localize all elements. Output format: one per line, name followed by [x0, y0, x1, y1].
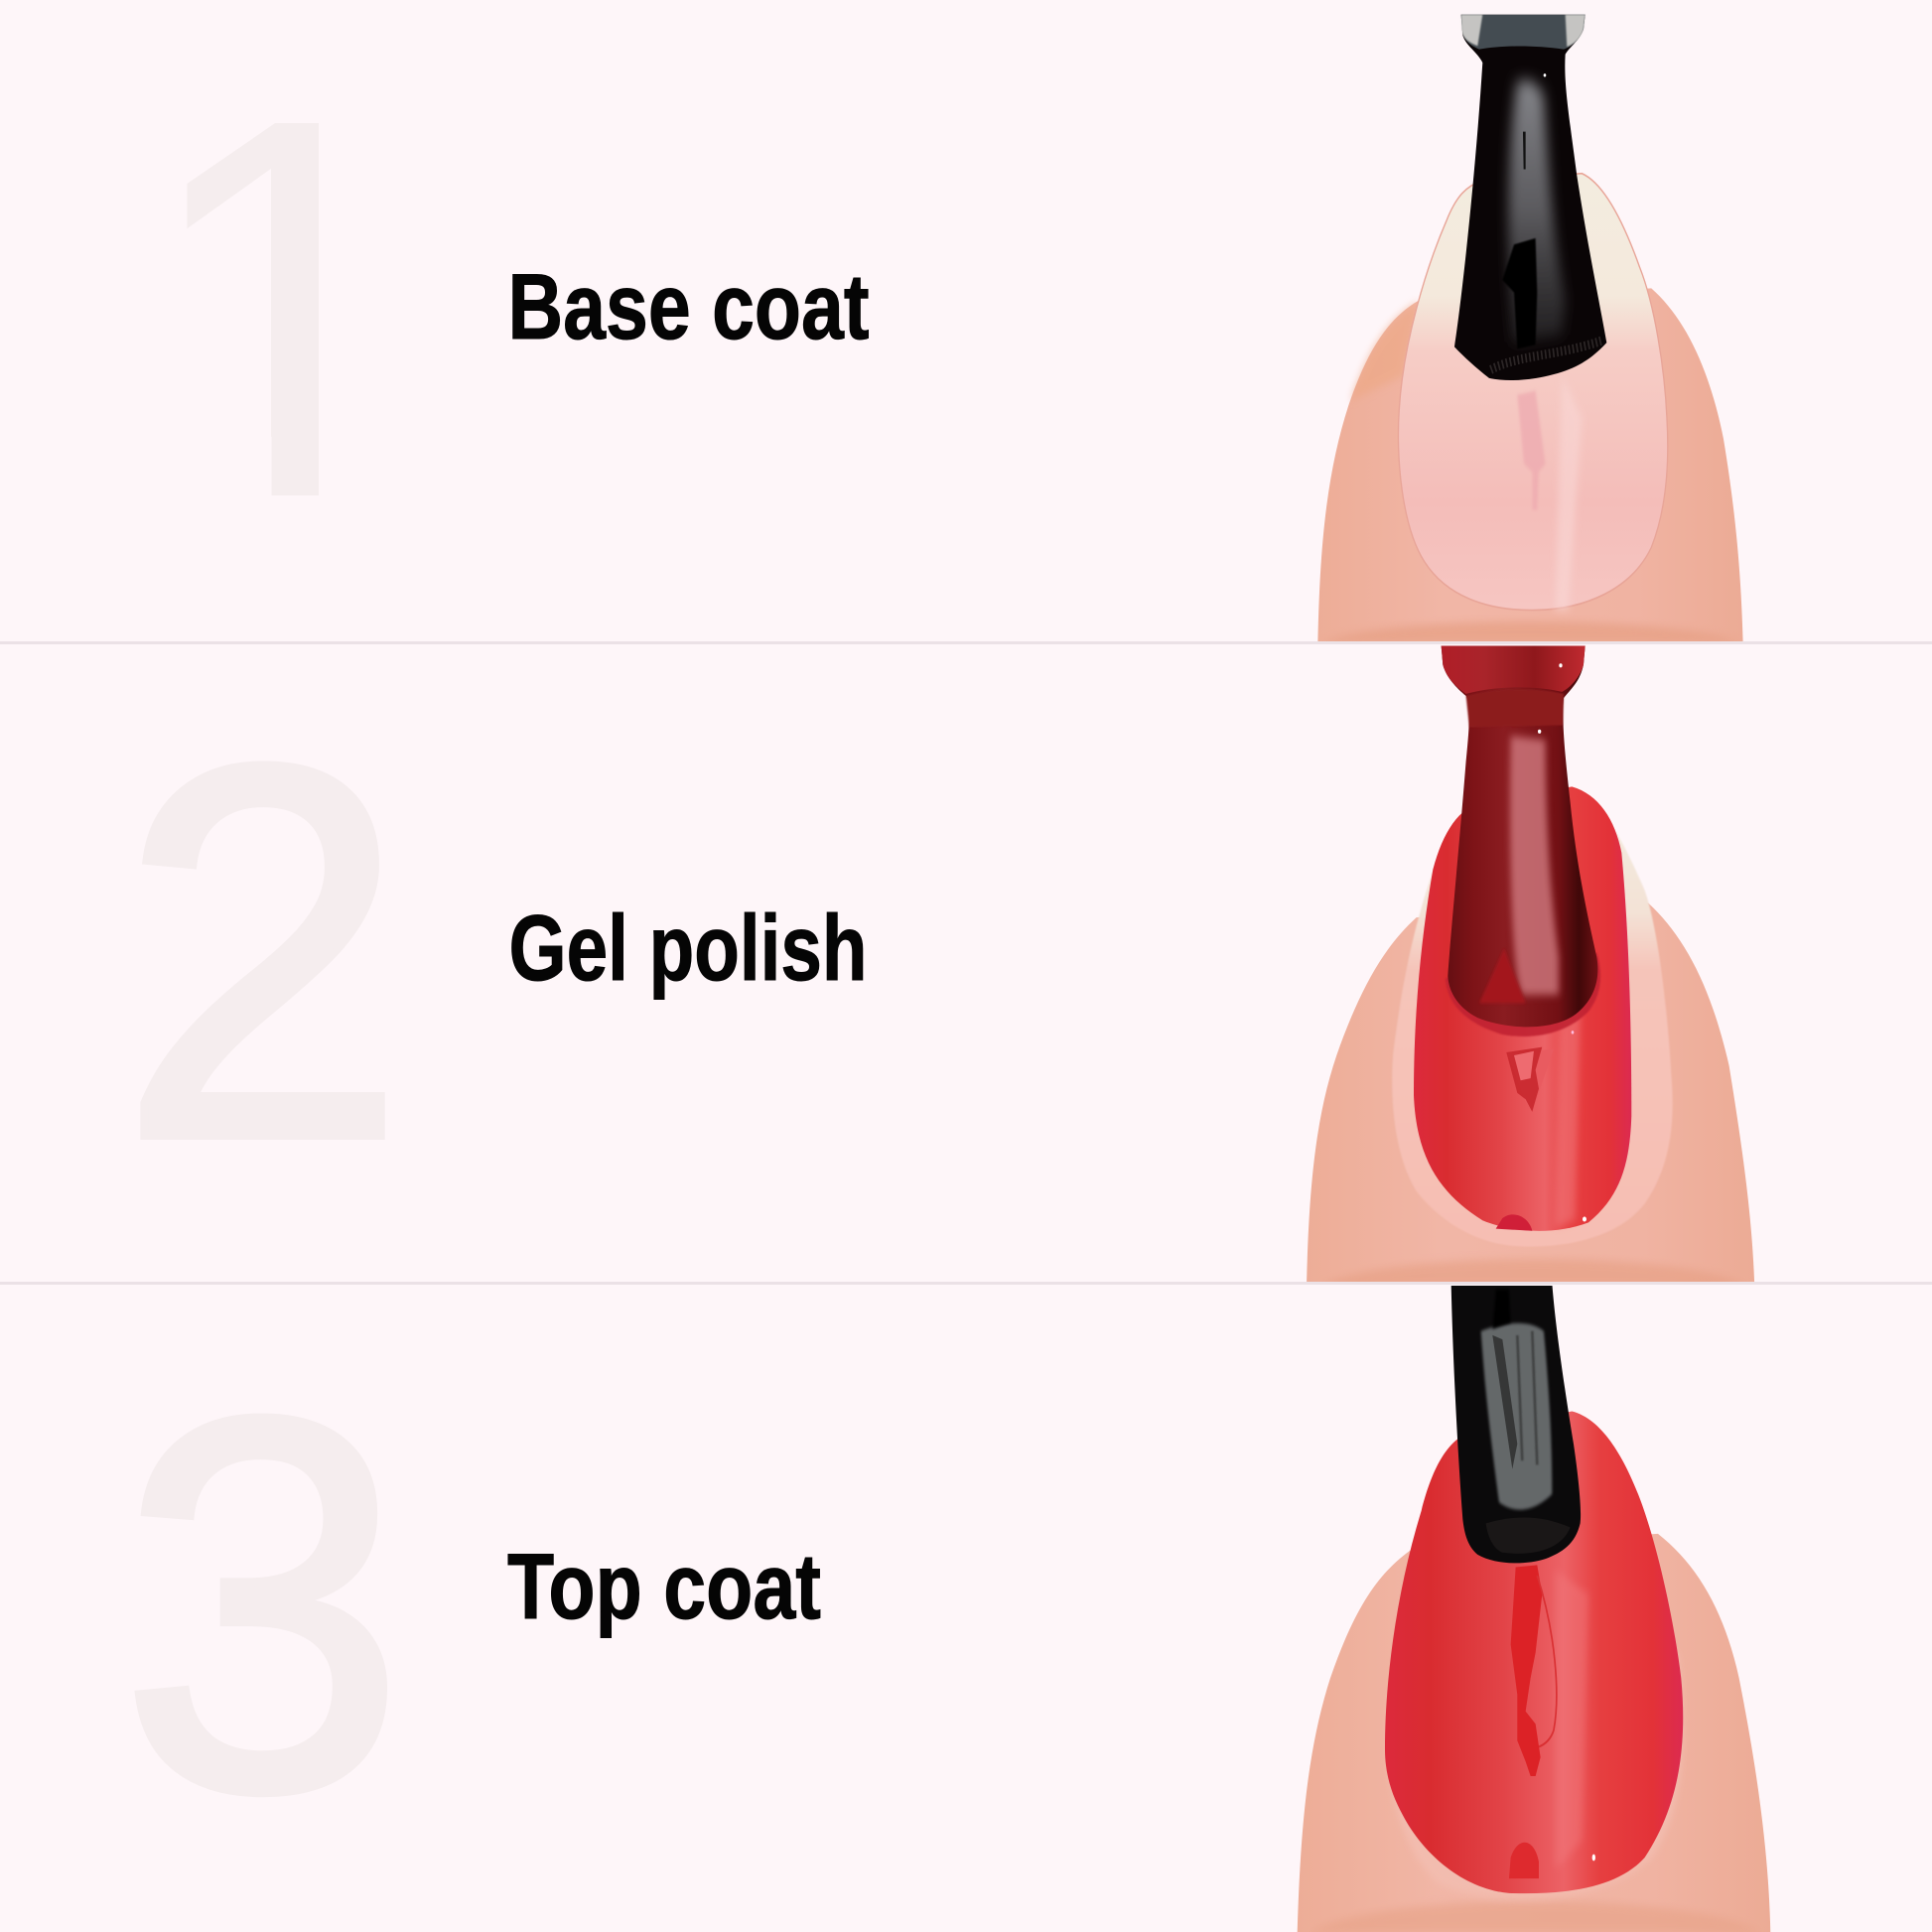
brush 3 highlight	[1481, 1323, 1552, 1510]
heading: gel polish: Gel polish	[508, 896, 868, 1000]
nail photo 1: base coat with clear nail and black brush	[1317, 15, 1743, 643]
brush 2	[1442, 646, 1597, 1027]
finger 3	[1298, 1534, 1770, 1932]
step number 3: 3	[119, 1309, 406, 1901]
brush 1 ferrule	[1461, 15, 1586, 50]
finger 1	[1317, 288, 1743, 643]
reflection streak	[1511, 1565, 1542, 1776]
brush 2 halo	[1446, 953, 1600, 1036]
heading: base coat: Base coat	[508, 254, 870, 358]
brush 1	[1454, 15, 1606, 380]
polish 3	[1385, 1412, 1683, 1893]
nail 2	[1392, 788, 1673, 1246]
heading: top coat: Top coat	[507, 1534, 821, 1638]
reflection triangle	[1507, 1049, 1554, 1112]
nail photo 2: gel polish with red brush	[1307, 646, 1754, 1288]
nail photo 3: top coat with black brush	[1298, 1283, 1770, 1932]
polish 2	[1414, 786, 1631, 1231]
brush 1 highlight	[1508, 80, 1566, 343]
finger 2	[1307, 902, 1754, 1288]
streak reflection	[1517, 391, 1546, 509]
nail 1	[1398, 174, 1668, 611]
brush 2 highlight	[1510, 736, 1559, 995]
step number 1: 1	[135, 7, 436, 611]
brush 3	[1451, 1283, 1581, 1563]
step number 2: 2	[118, 656, 407, 1249]
